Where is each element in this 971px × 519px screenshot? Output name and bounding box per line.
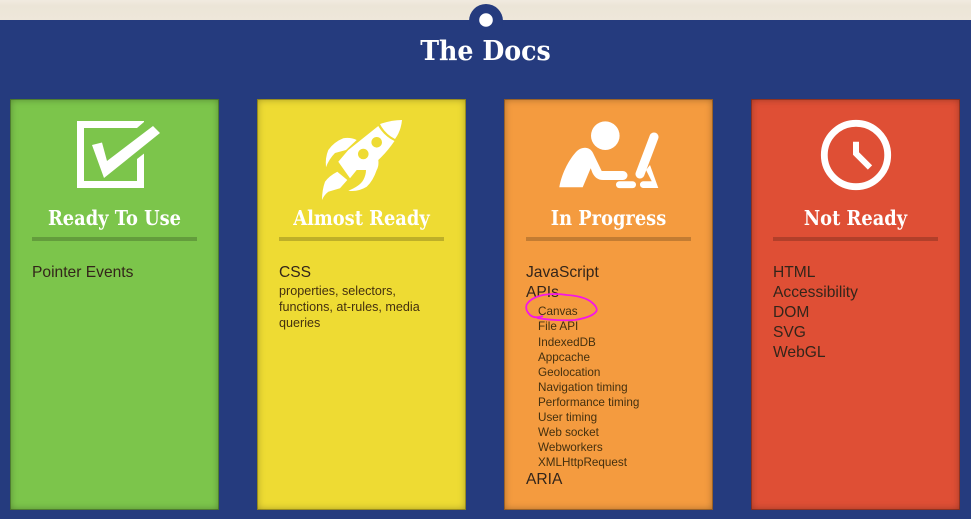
details: functions, at-rules, media <box>279 300 420 314</box>
heading: Not Ready <box>804 206 907 230</box>
panel: in progress: Web socket <box>538 426 599 439</box>
panel: in progress: Canvas <box>538 305 578 318</box>
panel: in progress: XMLHttpRequest <box>538 456 627 469</box>
divider <box>278 237 444 241</box>
divider <box>772 237 938 241</box>
details <box>279 284 420 330</box>
icon: checkbox <box>77 121 160 188</box>
details: properties, selectors, <box>279 284 396 298</box>
panel: in progress <box>504 99 713 510</box>
item: Pointer Events <box>32 264 133 281</box>
panel: not ready: SVG <box>773 324 806 341</box>
details: queries <box>279 316 320 330</box>
panel: ready to use <box>10 99 219 510</box>
panel: in progress: Webworkers <box>538 441 603 454</box>
panel: in progress: Performance timing <box>538 396 639 409</box>
panel: in progress: ARIA <box>526 471 562 488</box>
panel: not ready: Accessibility <box>773 284 858 301</box>
panel: not ready: DOM <box>773 304 809 321</box>
list: HTML <box>773 264 815 281</box>
divider <box>526 237 690 241</box>
annotation: pink hand-drawn circle <box>525 293 598 322</box>
textured top strip <box>0 0 971 20</box>
panel: in progress: Navigation timing <box>538 381 628 394</box>
panel: not ready: WebGL <box>773 344 826 361</box>
heading: In Progress <box>551 206 666 230</box>
icon: person at computer <box>559 121 658 188</box>
title: The Docs <box>420 35 551 67</box>
panel: in progress: IndexedDB <box>538 336 596 349</box>
panel: in progress: Appcache <box>538 351 590 364</box>
icon: rocket <box>322 120 402 200</box>
list: JavaScript <box>526 264 599 281</box>
panel: in progress: APIs <box>526 284 559 301</box>
divider <box>32 237 196 241</box>
panel: in progress: User timing <box>538 411 597 424</box>
panel: in progress: File API <box>538 320 578 333</box>
panel: not ready <box>751 99 960 510</box>
heading: Ready To Use <box>48 206 181 230</box>
heading: Almost Ready <box>293 206 430 230</box>
item: CSS <box>279 264 311 281</box>
icon: clock <box>820 120 892 190</box>
panel: in progress: Geolocation <box>538 366 600 379</box>
icon: notch tab <box>469 4 503 27</box>
panel: almost ready <box>257 99 466 510</box>
